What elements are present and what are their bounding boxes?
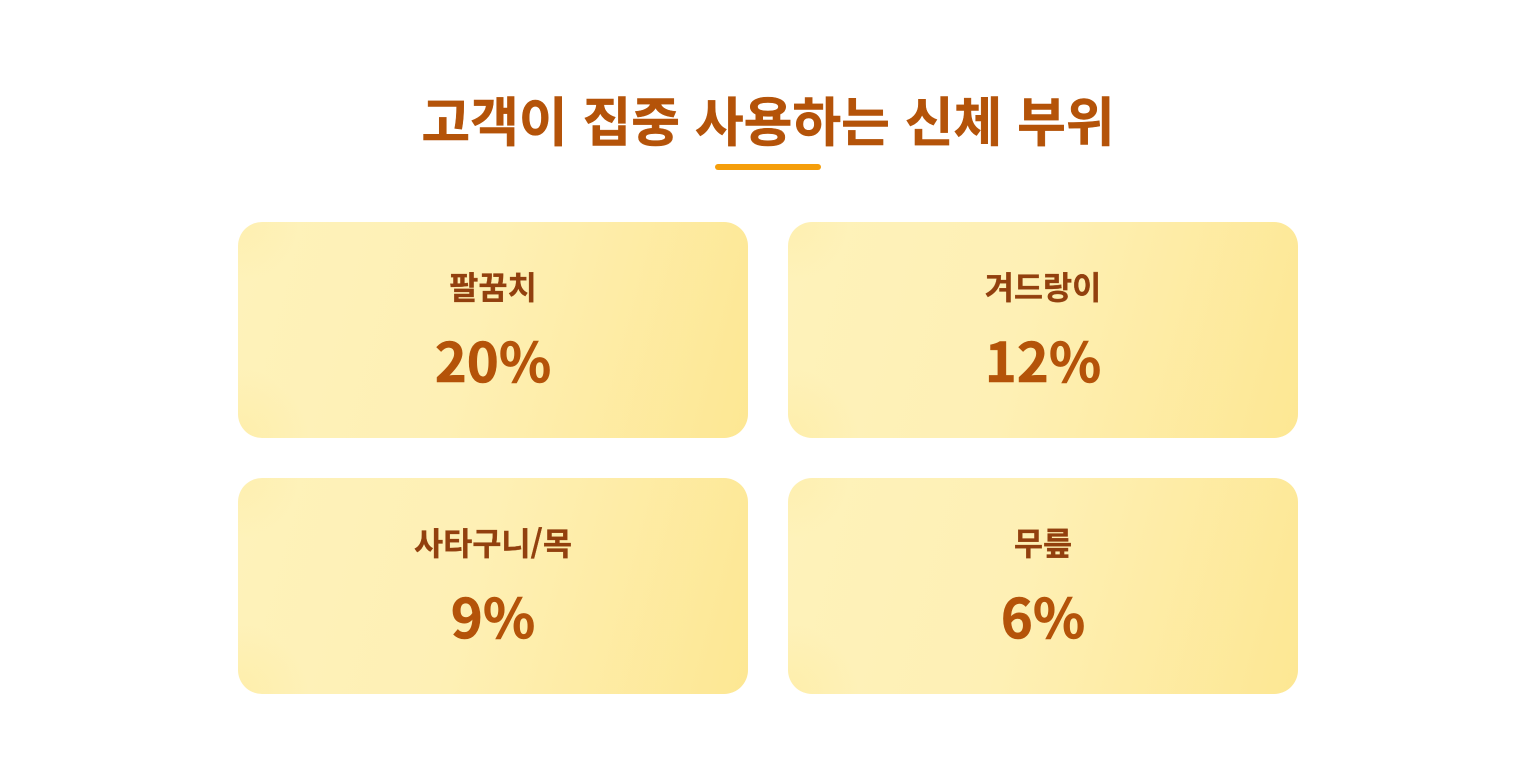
- value: 20%: 20%: [435, 319, 551, 398]
- panel: 무릎: [788, 478, 1298, 694]
- label: 무릎: 무릎: [1014, 519, 1072, 565]
- panel: 겨드랑이: [788, 222, 1298, 438]
- label: 겨드랑이: 겨드랑이: [985, 263, 1101, 309]
- label: 팔꿈치: 팔꿈치: [449, 263, 537, 309]
- panel: 사타구니/목: [238, 478, 748, 694]
- label: 사타구니/목: 사타구니/목: [414, 519, 572, 565]
- value: 9%: 9%: [451, 575, 535, 654]
- title underline: [715, 164, 821, 170]
- value: 12%: 12%: [985, 319, 1101, 398]
- title: 고객이 집중 사용하는 신체 부위: [421, 80, 1115, 156]
- value: 6%: 6%: [1001, 575, 1085, 654]
- panel: 팔꿈치: [238, 222, 748, 438]
